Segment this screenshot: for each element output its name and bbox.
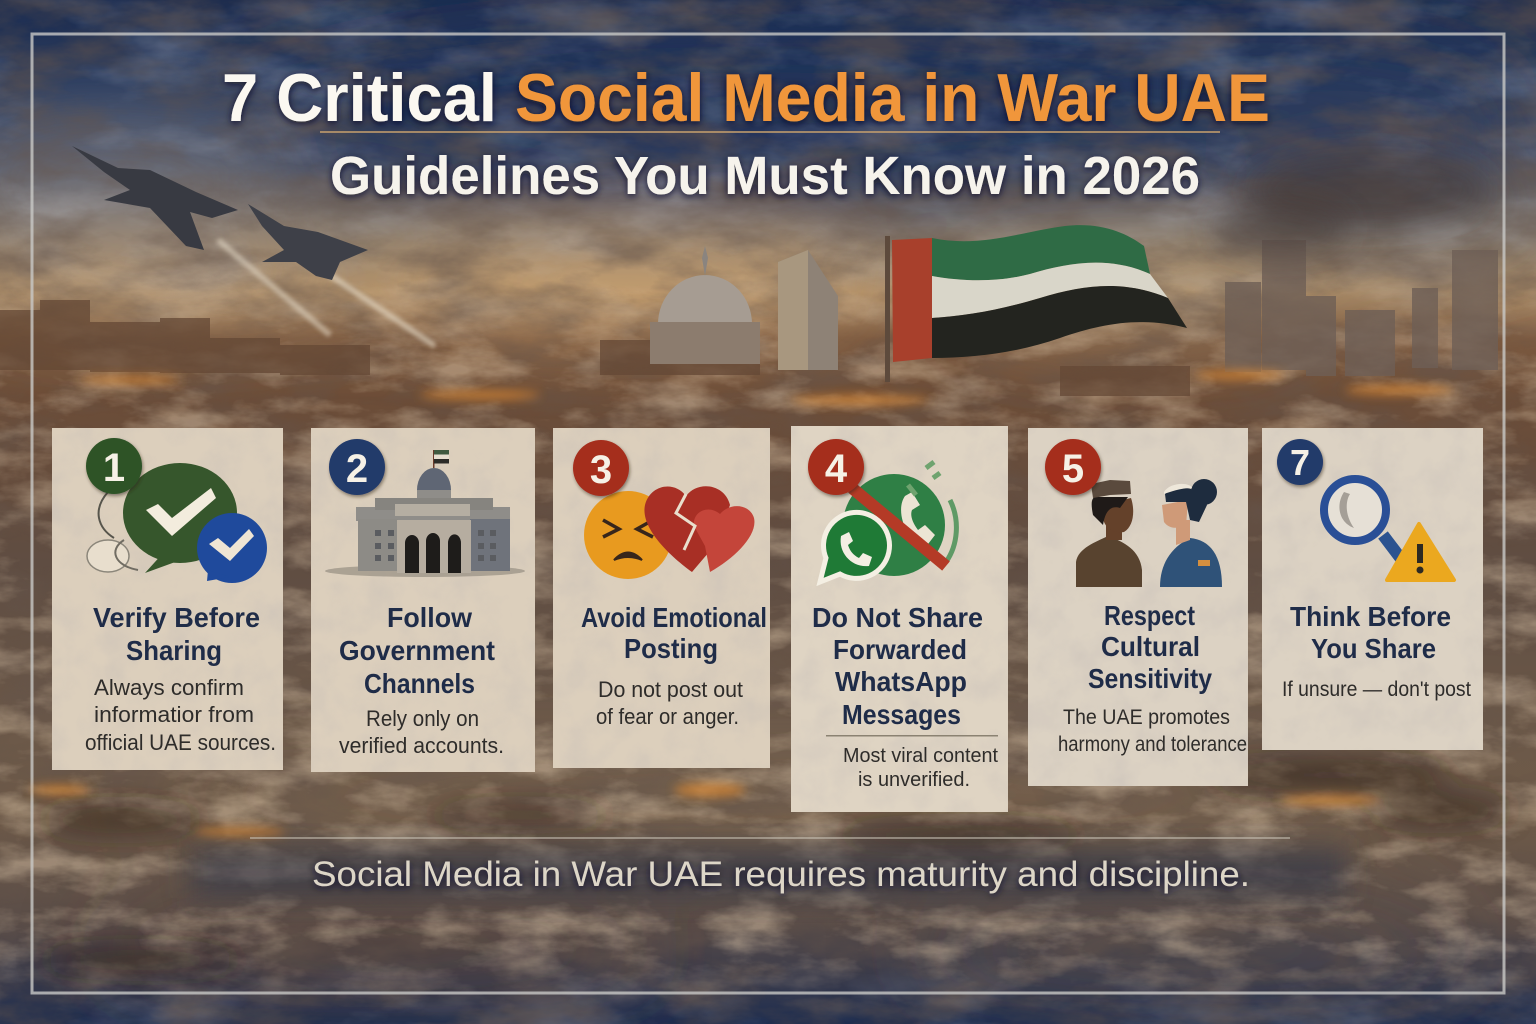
icon: speech bubbles with check marks [87, 463, 267, 583]
badge: number 3: 3 [590, 448, 612, 492]
body text: Always confirm [94, 675, 244, 700]
badge: number 7: 7 [1290, 442, 1310, 483]
flag: UAE [885, 225, 1187, 382]
footer banner: Social Media in War UAE requires maturity and discipline. [312, 855, 1250, 894]
footer banner [190, 837, 1346, 898]
body text: The UAE promotes [1063, 706, 1230, 729]
body text: verified accounts. [339, 733, 504, 758]
heading: Follow [387, 602, 472, 633]
title [222, 60, 1270, 136]
body text: If unsure — don't post [1282, 678, 1471, 701]
heading: Sharing [126, 635, 222, 666]
body text [596, 677, 744, 729]
badge: number 2 [329, 439, 385, 495]
heading: Avoid Emotional [581, 602, 767, 633]
panel: card 2 follow government channels [311, 428, 535, 772]
badge: number 1: 1 [103, 446, 125, 490]
subtitle: Guidelines You Must Know in 2026 [330, 146, 1200, 206]
heading: Government [339, 635, 495, 666]
title: Social Media in War UAE [515, 60, 1270, 136]
skyline: distant city [0, 154, 1498, 396]
body text [843, 744, 998, 791]
badge: number 3 [573, 440, 629, 496]
heading [339, 602, 495, 699]
heading: Do Not Share [812, 602, 983, 633]
icon: two people facing each other [1076, 479, 1222, 587]
badge: number 4 [808, 439, 864, 495]
title: 7 Critical [222, 60, 497, 136]
panel: card 7 think before you share [1262, 428, 1483, 750]
heading: You Share [1311, 633, 1436, 664]
body text: informatior from [94, 702, 254, 727]
body text: official UAE sources. [85, 730, 276, 755]
badge: number 7 [1277, 439, 1323, 485]
heading: Sensitivity [1088, 663, 1212, 694]
heading: Forwarded [833, 634, 967, 665]
heading: Messages [842, 699, 961, 730]
body text: harmony and tolerance [1058, 733, 1247, 756]
body text: Most viral content [843, 744, 998, 767]
heading [1290, 601, 1451, 664]
jets with smoke trails [72, 146, 435, 346]
heading [812, 602, 983, 730]
body text: of fear or anger. [596, 704, 739, 729]
badge: number 5 [1045, 439, 1101, 495]
heading: Channels [364, 668, 475, 699]
heading: Cultural [1101, 631, 1200, 662]
heading: Verify Before [93, 602, 260, 633]
body text [1058, 706, 1247, 756]
panel: card 3 avoid emotional posting [553, 428, 770, 768]
landmarks: dome and tower [650, 246, 838, 370]
body text: Rely only on [366, 706, 479, 731]
body text: Do not post out [598, 677, 744, 702]
badge: number 4: 4 [825, 447, 848, 491]
heading [93, 602, 260, 666]
badge: number 2: 2 [346, 447, 368, 491]
embers: fire glows on the ground [30, 370, 1455, 837]
heading [581, 602, 767, 664]
heading: WhatsApp [835, 666, 967, 697]
badge: number 5: 5 [1062, 447, 1084, 491]
icon: crossed out WhatsApp [820, 462, 956, 582]
panel: card 1 verify before sharing [52, 428, 283, 770]
panel: card 5 respect cultural sensitivity [1028, 428, 1248, 786]
icon: government building [325, 450, 525, 577]
heading [1088, 600, 1212, 694]
panel: card 4 do not share forwarded messages [791, 426, 1008, 812]
icon: angry face and broken heart [584, 486, 754, 579]
heading: Posting [624, 633, 718, 664]
body text [339, 706, 504, 758]
icon: magnifier and warning triangle [1324, 479, 1454, 580]
heading: Respect [1104, 600, 1195, 631]
body text [85, 675, 276, 755]
body text: is unverified. [858, 768, 970, 791]
heading: Think Before [1290, 601, 1451, 632]
badge: number 1 [86, 438, 142, 494]
